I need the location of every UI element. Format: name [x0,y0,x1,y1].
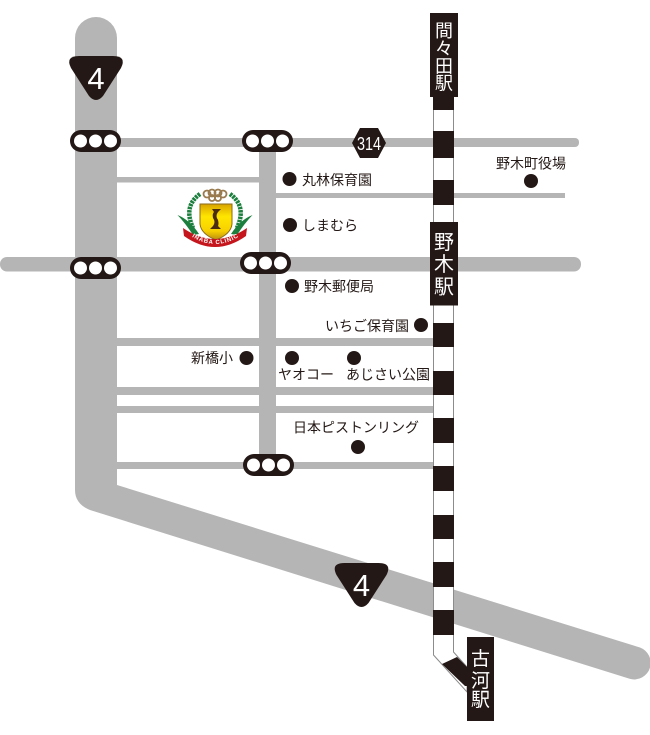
place: いちご保育園: いちご保育園 [325,318,409,334]
route 4 sign north: 4 [87,61,105,96]
traffic light [70,257,121,279]
station: 野木駅: 野 [434,232,454,254]
station: 間々田駅: 駅 [435,74,453,94]
place: 丸林保育園: 丸林保育園 [302,172,372,188]
station: 野木駅 [430,222,458,306]
route 4 sign north [69,56,123,100]
station: 野木駅: 駅 [434,276,454,298]
place: あじさい公園 [346,351,430,382]
route 4 sign south: 4 [353,568,370,603]
station: 間々田駅: 々 [435,39,453,59]
route 314 sign [352,128,386,158]
traffic light [242,130,293,152]
station: 古河駅: 駅 [471,690,490,711]
traffic light [70,130,121,152]
station: 間々田駅 [430,13,458,97]
place: あじさい公園: あじさい公園 [346,366,430,382]
place: 日本ピストンリング [293,420,419,454]
place: ヤオコー: ヤオコー [278,366,334,382]
station: 間々田駅: 田 [435,56,453,76]
place: 日本ピストンリング: 日本ピストンリング [293,420,419,436]
station: 古河駅 [467,637,494,721]
station: 古河駅: 河 [471,670,490,692]
place: 新橋小 [191,350,254,366]
place: 野木町役場 [496,156,566,188]
station: 野木駅: 木 [434,253,454,276]
route 4 sign south [335,563,388,607]
station: 間々田駅: 間 [435,21,453,41]
clinic logo: INABA CLINIC [192,233,238,244]
clinic logo [178,188,252,247]
traffic light [240,252,291,274]
route 314 sign: 314 [357,134,381,154]
place: 野木町役場: 野木町役場 [496,156,566,172]
place: 新橋小: 新橋小 [191,350,233,366]
place: ヤオコー [278,351,334,382]
railway [433,95,468,692]
place: 野木郵便局: 野木郵便局 [304,278,374,294]
place: しまむら: しまむら [302,218,358,234]
station: 古河駅: 古 [471,648,490,670]
traffic light [243,454,294,476]
